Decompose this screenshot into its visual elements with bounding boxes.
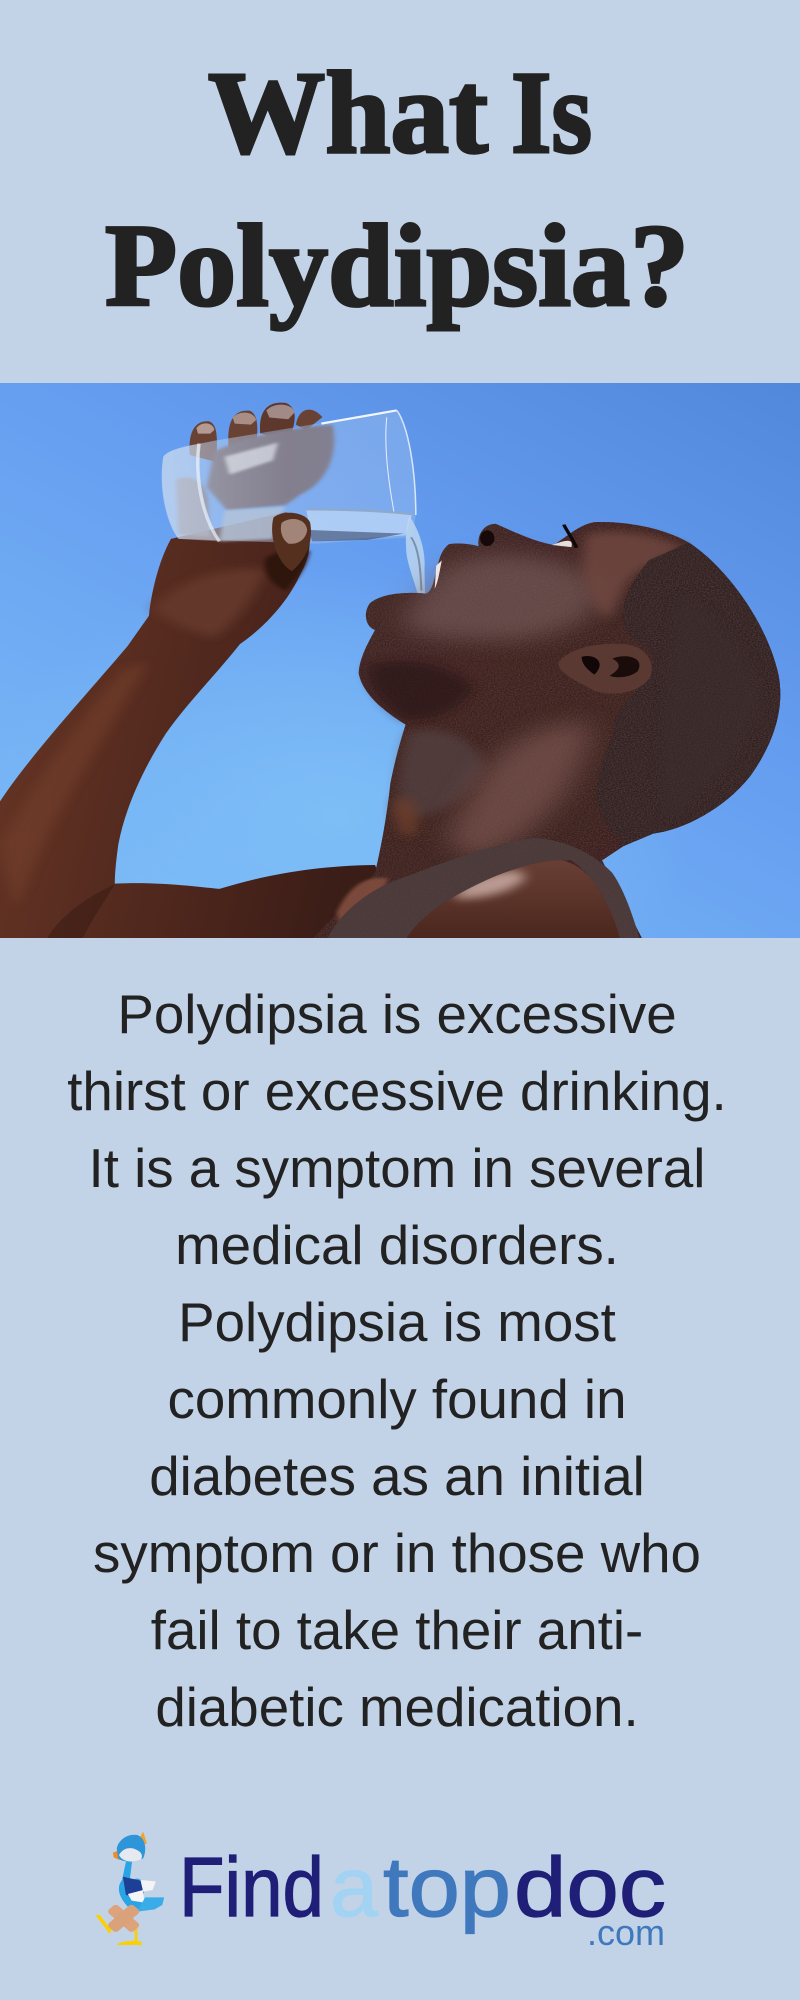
fingers — [189, 403, 322, 462]
photo: man drinking water from a glass — [0, 383, 800, 940]
hair — [597, 542, 780, 846]
face highlights — [403, 555, 604, 641]
body text block: diabetic medication. — [155, 1676, 639, 1738]
wordmark: Find — [179, 1840, 324, 1934]
body text block: Polydipsia is most — [178, 1291, 616, 1353]
wordmark: a — [330, 1840, 378, 1934]
hand seen through the glass — [176, 425, 334, 537]
title: Polydipsia? — [105, 200, 689, 331]
arm and hand — [0, 512, 408, 940]
water stream — [406, 516, 425, 594]
title — [105, 47, 689, 331]
man figure — [0, 403, 780, 940]
body text block: fail to take their anti- — [151, 1599, 643, 1661]
wordmark: top — [383, 1840, 511, 1934]
body text block: diabetes as an initial — [149, 1445, 645, 1507]
sky background — [0, 383, 800, 938]
icon: duck mascot with bandage — [95, 1832, 164, 1945]
body text block: It is a symptom in several — [89, 1137, 705, 1199]
ear — [558, 644, 652, 694]
wordmark — [179, 1840, 666, 1934]
title: Is — [511, 47, 592, 178]
body text block: thirst or excessive drinking. — [67, 1060, 727, 1122]
wordmark: doc — [514, 1840, 666, 1934]
body text block: Polydipsia is excessive — [117, 983, 677, 1045]
tank top strap — [327, 838, 640, 940]
nostril and eye — [480, 530, 494, 546]
body text block — [67, 983, 727, 1738]
wordmark suffix: .com — [587, 1912, 665, 1953]
body text block: symptom or in those who — [93, 1522, 701, 1584]
shoulder and chest — [337, 858, 622, 940]
head and neck — [311, 522, 780, 940]
title: What — [208, 47, 488, 178]
logo: Findatopdoc.com — [95, 1832, 666, 1953]
body text block: commonly found in — [168, 1368, 626, 1430]
glass of water — [162, 410, 416, 544]
thumb over glass — [272, 513, 311, 571]
body text block: medical disorders. — [175, 1214, 619, 1276]
